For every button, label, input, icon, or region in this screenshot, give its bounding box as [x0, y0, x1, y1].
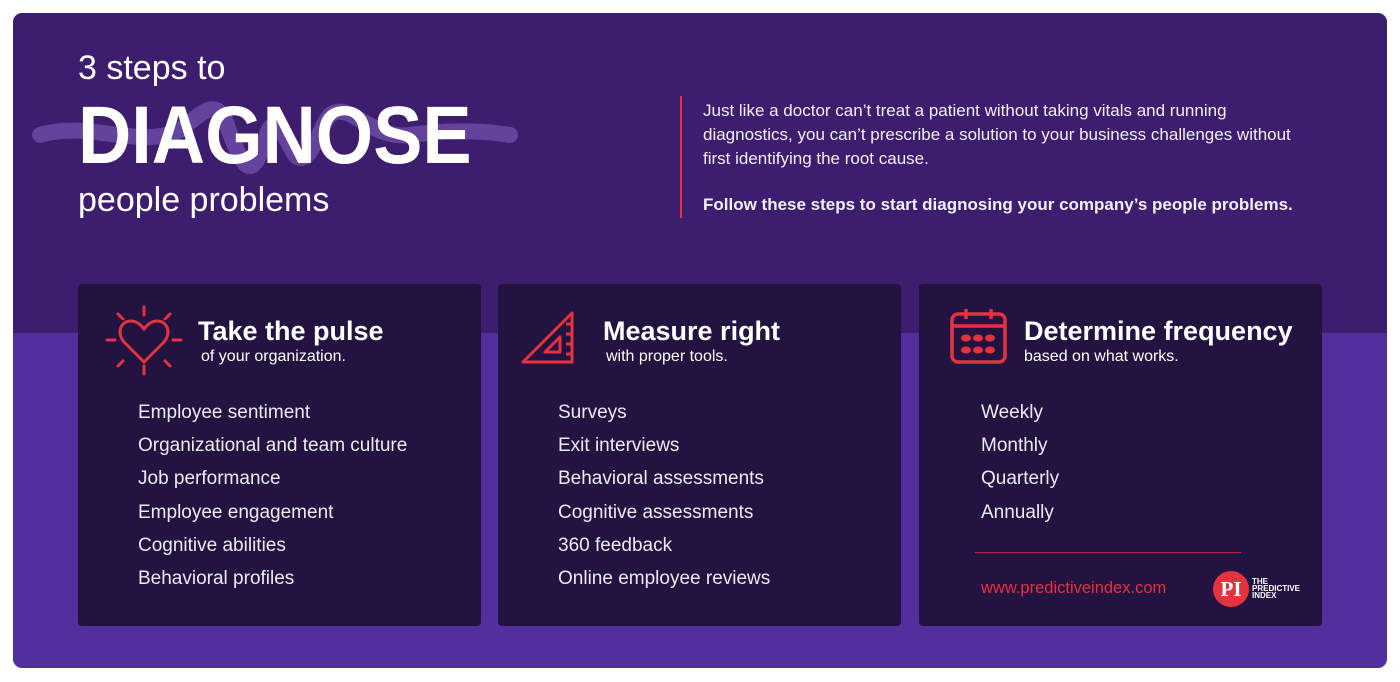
logo: [1213, 571, 1300, 607]
list: Organizational and team culture: [138, 435, 407, 456]
list: Job performance: [138, 468, 281, 489]
list: Surveys: [558, 402, 627, 423]
list: Exit interviews: [558, 435, 679, 456]
list: Employee sentiment: [138, 402, 310, 423]
intro text: Just like a doctor can’t treat a patient without taking vitals and running diagnostics, you can’t prescribe a solution to your business challenges without first identifying the root cause.: [703, 101, 1291, 168]
title: people problems: [78, 181, 329, 219]
list: Annually: [981, 502, 1054, 523]
panel: measure right: Measure right: [603, 316, 780, 346]
title: DIAGNOSE: [78, 90, 472, 181]
list: 360 feedback: [558, 535, 672, 556]
list: Cognitive assessments: [558, 502, 753, 523]
panel: take the pulse: of your organization.: [201, 348, 346, 365]
panel: determine frequency: [919, 284, 1322, 626]
title: [78, 49, 472, 219]
list: [981, 402, 1060, 523]
list: Employee engagement: [138, 502, 333, 523]
list: Behavioral profiles: [138, 568, 294, 589]
logo: PI: [1220, 577, 1242, 601]
icon: calendar: [950, 309, 1007, 364]
panel: measure right: [498, 284, 901, 626]
logo: THE: [1252, 577, 1268, 586]
list: Cognitive abilities: [138, 535, 286, 556]
list: Behavioral assessments: [558, 468, 764, 489]
list: Online employee reviews: [558, 568, 770, 589]
logo: PREDICTIVE: [1252, 584, 1300, 593]
decorative pulse wave: [32, 101, 518, 174]
divider line: [680, 96, 682, 218]
url: www.predictiveindex.com: [981, 579, 1166, 597]
logo: INDEX: [1252, 591, 1276, 600]
panel: determine frequency: based on what works.: [1024, 348, 1179, 365]
title: 3 steps to: [78, 49, 225, 87]
icon: triangle ruler: [522, 311, 574, 364]
intro text: Follow these steps to start diagnosing your company’s people problems.: [703, 195, 1293, 214]
intro text: [703, 101, 1293, 214]
list: [138, 402, 407, 589]
list: Quarterly: [981, 468, 1059, 489]
panel: measure right: with proper tools.: [606, 348, 728, 365]
panel: take the pulse: [78, 284, 481, 626]
icon: heart: [106, 306, 182, 376]
list: Weekly: [981, 402, 1043, 423]
panel: determine frequency: Determine frequency: [1024, 316, 1293, 346]
list: [558, 402, 770, 589]
panel: take the pulse: Take the pulse: [198, 316, 384, 346]
list: Monthly: [981, 435, 1048, 456]
